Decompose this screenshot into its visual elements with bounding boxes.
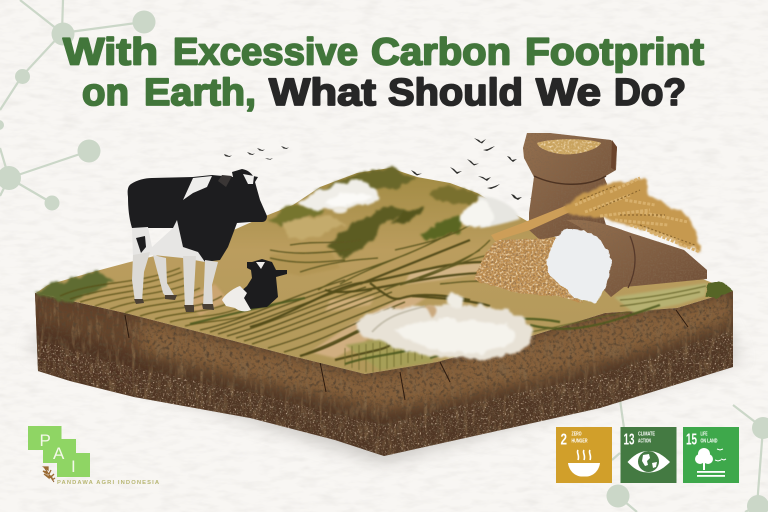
logo: Pandawa Agri Indonesia (28, 426, 160, 486)
title: We (536, 72, 601, 114)
logo wordmark: PANDAWA AGRI INDONESIA (57, 480, 160, 486)
clouds (298, 181, 533, 359)
cow rear black spot (136, 236, 146, 253)
SDG badge 2: zero hunger: HUNGER (572, 438, 588, 444)
decorative molecule network, top left (0, 0, 156, 210)
dark upper-right field rim (706, 281, 733, 298)
cow body (128, 169, 267, 262)
title: Earth, (144, 72, 256, 114)
hill vegetation (36, 168, 482, 302)
SDG badge 13: climate action: ACTION (638, 438, 651, 444)
icon: tree, birds and ground (698, 448, 710, 460)
lying sack (566, 220, 707, 297)
SDG badge 13: climate action: 13 (624, 432, 635, 448)
leaf icon (44, 467, 54, 482)
SDG badge 2: zero hunger (556, 427, 612, 483)
rice stalk bundle (491, 178, 701, 252)
title: on (82, 72, 129, 114)
sacks and rice (474, 133, 707, 303)
SDG badge 13: climate action: CLIMATE (638, 432, 655, 438)
SDG badge 2: zero hunger: ZERO (572, 432, 582, 438)
SDG badge 15: life on land: ON LAND (700, 438, 718, 444)
cow legs (132, 252, 218, 310)
spilled grain pile (474, 238, 584, 303)
cow white shoulder patch (183, 176, 212, 200)
logo: Pandawa Agri Indonesia: A (53, 444, 65, 463)
title: Do? (614, 72, 686, 114)
title: Should (388, 72, 523, 114)
rice terrace field surface (36, 168, 733, 374)
decorative molecule network, bottom right (606, 400, 768, 512)
SDG badge 15: life on land: 15 (686, 432, 697, 448)
icon: earth eye (628, 451, 670, 472)
calf (222, 259, 287, 311)
cow hooves (134, 295, 214, 312)
title: Excessive (173, 32, 358, 74)
land block (30, 168, 740, 460)
birds, left flock (224, 146, 289, 160)
title: Carbon (371, 32, 511, 74)
logo: Pandawa Agri Indonesia: P (40, 431, 51, 450)
cow ear (218, 175, 232, 187)
icon: bowl of soup (568, 463, 600, 476)
soil cross-section (30, 285, 740, 460)
cow forehead blaze (243, 174, 254, 184)
cow white belly and rear (132, 220, 205, 262)
white flour (547, 229, 611, 302)
terrace contour lines (60, 225, 706, 372)
title: What (269, 72, 376, 114)
birds, right flock (411, 138, 542, 204)
SDG badge 15: life on land: LIFE (700, 432, 708, 438)
upper sack of grain (523, 133, 617, 240)
title: Footprint (525, 32, 704, 74)
logo: Pandawa Agri Indonesia: I (71, 457, 76, 476)
SDG badge 13: climate action (620, 427, 676, 483)
SDG badge 15: life on land (683, 427, 739, 483)
ground shadow below land block (30, 320, 740, 462)
SDG badge 2: zero hunger: 2 (560, 432, 567, 448)
cow (128, 169, 267, 312)
sandy paddies (185, 250, 707, 370)
title (63, 32, 704, 114)
title: With (63, 32, 158, 74)
